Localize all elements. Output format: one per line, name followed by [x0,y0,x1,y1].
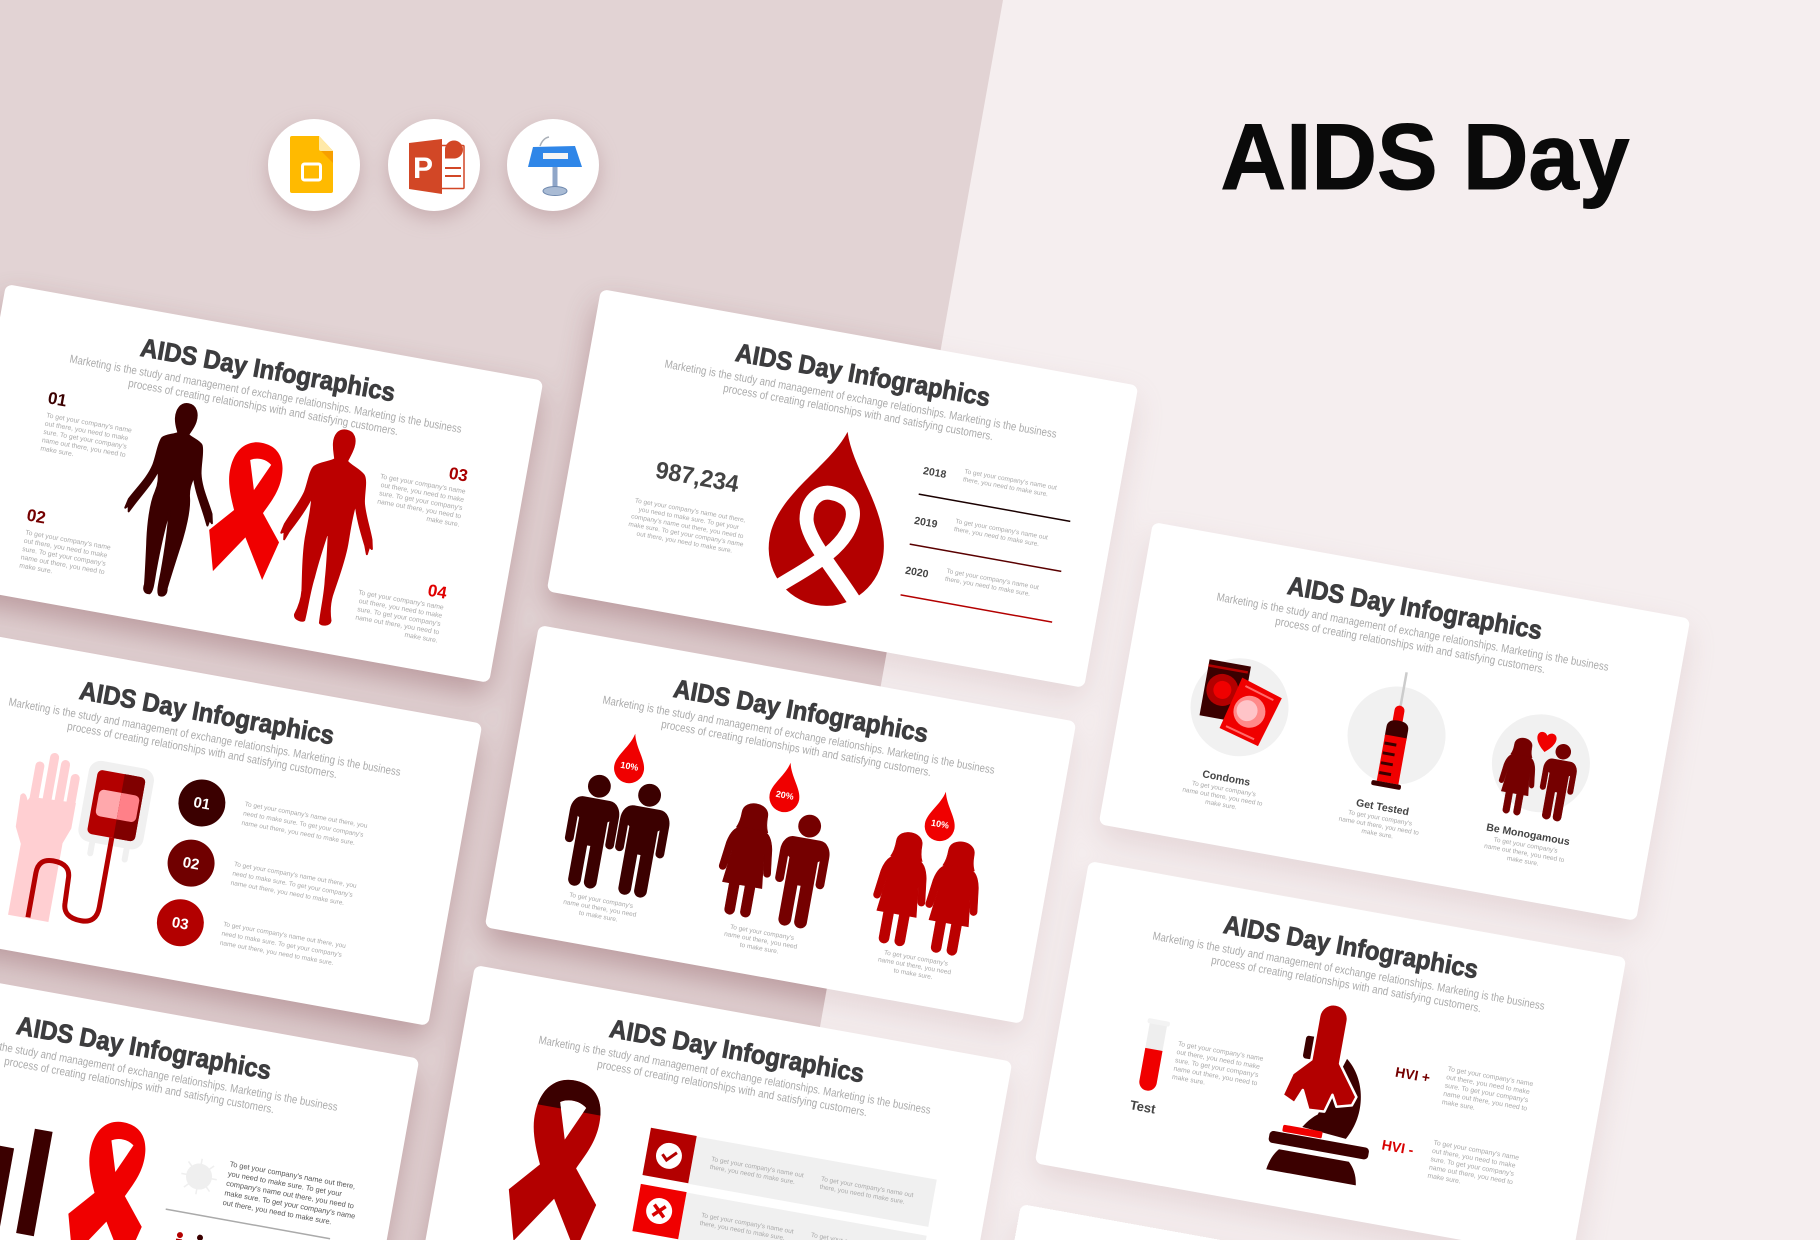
paragraph: you need to make sure. To get your [638,506,740,531]
year 2020: 2020 [904,565,929,581]
label get tested: Get Tested [1355,797,1410,818]
circle 02 [164,836,218,890]
slide card 8: ribbon with checklist [421,965,1012,1240]
text block 04: name out there, you need to [355,614,440,636]
text hvi plus [1441,1066,1534,1121]
group 2: woman and man: to make sure. [739,942,779,956]
text test: make sure. [1171,1074,1206,1087]
icon: microscope [1263,997,1394,1187]
text 01: need to make sure. To get your company's [243,810,365,839]
slide card 9: cropped bottom right [967,1204,1558,1240]
text condoms: name out there, you need to [1182,786,1263,808]
text block 03: name out there, you need to [377,498,462,520]
heading: AIDS Day Infographics [1221,909,1481,984]
text block 01 [40,412,132,468]
icon: keynote [507,119,599,211]
subtitle: Marketing is the study and management of exchange relationships. Marketing is the business [8,697,402,779]
paragraph [626,497,749,557]
subtitle: Marketing is the study and management of exchange relationships. Marketing is the business [664,359,1058,441]
divider [166,1209,330,1239]
text test: out there, you need to make [1176,1049,1261,1071]
small people icons [174,1231,203,1240]
text condoms: make sure. [1205,799,1238,811]
slide card 4: couples and drops [485,625,1076,1024]
red ribbon [61,1116,159,1240]
text test: sure. To get your company's [1174,1057,1260,1079]
text be monogamous: name out there, you need to [1484,843,1565,864]
group 1: two men: name out there, you need [563,899,637,919]
paragraph: you need to make sure. To get your [227,1169,343,1198]
text test: name out there, you need to [1173,1066,1258,1087]
text block 04: out there, you need to make [358,598,443,620]
paragraph: company's name out there, you need to [631,513,744,540]
main title: AIDS Day [1220,104,1630,209]
circle 02: 02 [181,854,201,874]
year 2018: there, you need to make sure. [962,476,1049,498]
subtitle: process of creating relationships with and satisfying customers. [1210,955,1482,1015]
text hvi minus: out there, you need to make [1431,1148,1516,1170]
icon: test tube [1135,1018,1170,1093]
group 1: two men: To get your company's [569,892,634,910]
text block 02: sure. To get your company's [22,546,107,568]
group 1: two men: 10% [620,760,639,773]
text condoms: To get your company's [1191,780,1257,799]
circle 03 [153,895,208,950]
text block 03: sure. To get your company's [378,490,464,512]
big number: 987,234 [653,457,741,498]
subtitle: Marketing is the study and management of exchange relationships. Marketing is the business [538,1035,932,1117]
group 2: woman and man [705,754,844,961]
text block 03: make sure. [426,516,460,529]
paragraph: make sure. To get your company's name [628,521,744,549]
row 1: check: To get your company's name out [820,1176,914,1199]
circle 01: 01 [192,794,211,814]
female silhouette [111,396,232,602]
row 2: cross [632,1184,927,1240]
group 3: two women: To get your company's [883,949,949,968]
male silhouette [267,422,392,631]
text hvi minus: To get your company's name [1433,1140,1520,1162]
text block 01: make sure. [40,445,74,458]
group 1: two men: to make sure. [578,910,618,924]
text be monogamous: To get your company's [1493,836,1559,855]
text block 01: out there, you need to make [44,421,129,442]
text be monogamous [1482,835,1567,872]
label test: Test [1129,1097,1157,1117]
text block 04 [352,589,445,645]
year 2019: there, you need to make sure. [953,526,1040,548]
blood bag [74,759,156,865]
text be monogamous: make sure. [1506,855,1539,868]
subtitle: Marketing is the study and management of exchange relationships. Marketing is the business [69,354,463,436]
text 01: name out there, you need to make sure. [241,820,356,847]
group 1: two men [552,725,684,930]
number 01: 01 [46,388,68,410]
group 3: two women [860,782,997,987]
slide card 2: blood drop [547,289,1138,688]
label be monogamous: Be Monogamous [1485,821,1571,848]
text get tested: name out there, you need to [1338,816,1420,837]
text hvi minus: sure. To get your company's [1430,1156,1515,1178]
text hvi plus: out there, you need to make [1446,1074,1530,1096]
icon: google slides [268,119,360,211]
red ribbon [202,436,296,582]
background diagonal darker panel [0,0,1003,1240]
subtitle: process of creating relationships with and satisfying customers. [127,378,399,438]
text block 02: name out there, you need to [20,554,105,576]
text get tested: make sure. [1361,828,1394,840]
subtitle: process of creating relationships with and satisfying customers. [3,1056,275,1116]
icon: couple and heart [1483,706,1598,826]
group 3: two women: 10% [930,818,950,831]
year 2018: To get your company's name out [964,468,1057,492]
year 2019 [910,511,1067,571]
number 02: 02 [25,506,47,528]
icon: virus [178,1156,220,1197]
text block 01: name out there, you need to [41,437,126,459]
row 1: check: there, you need to make sure. [819,1184,905,1206]
blood drop with white ribbon [759,422,904,615]
icon: powerpoint [388,119,480,211]
text hvi plus: To get your company's name [1447,1066,1534,1088]
text 02: To get your company's name out there, you [233,861,358,890]
slide card 6: microscope test [1035,861,1626,1240]
year 2020: To get your company's name out [946,568,1040,591]
text block 04: sure. To get your company's [357,606,442,628]
subtitle: process of creating relationships with and satisfying customers. [66,721,338,781]
paragraph: company's name out there, you need to [225,1179,355,1210]
text 03: need to make sure. To get your company's [221,930,343,959]
text 02 [230,861,358,909]
text block 01: To get your company's name [46,412,132,435]
text 01 [241,801,368,849]
group 2: woman and man: 20% [775,789,794,802]
text 03: To get your company's name out there, you [223,921,347,950]
text block 01: sure. To get your company's [43,429,128,451]
year 2018 [919,461,1076,521]
text hvi minus: make sure. [1427,1173,1461,1185]
heading: AIDS Day Infographics [138,332,398,407]
slide card 7: bars and ribbon [0,962,419,1240]
text hvi plus: name out there, you need to [1443,1091,1528,1113]
slide card 1: body silhouettes [0,284,543,683]
slide card 5: prevention [1099,522,1690,921]
text block 02: make sure. [19,562,53,575]
tube [28,826,112,929]
subtitle: process of creating relationships with and satisfying customers. [596,1059,868,1119]
number 04: 04 [426,581,449,603]
paragraph [222,1159,361,1230]
group 2: woman and man: name out there, you need [724,931,798,951]
year 2019: 2019 [913,515,938,531]
text block 03 [374,473,467,529]
text block 03: out there, you need to make [380,482,465,504]
group 2: woman and man: To get your company's [729,924,795,942]
text 01: To get your company's name out there, you [244,801,368,830]
app icons row [268,119,599,218]
icon: powerpoint: P [413,152,433,185]
subtitle: process of creating relationships with and satisfying customers. [660,719,932,779]
group 3: two women: name out there, you need [877,956,952,976]
text 03 [219,921,347,969]
text block 02 [19,529,111,585]
paragraph: out there, you need to make sure. [636,531,733,555]
label hvi plus: HVI + [1394,1064,1431,1086]
heading: AIDS Day Infographics [77,675,337,750]
text 02: name out there, you need to make sure. [230,880,345,907]
text block 04: To get your company's name [358,589,444,612]
row 1: check: there, you need to make sure. [709,1164,796,1186]
year 2019: To get your company's name out [955,518,1048,542]
subtitle: process of creating relationships with and satisfying customers. [722,383,994,443]
label hvi minus: HVI - [1381,1136,1415,1158]
paragraph: make sure. To get your company's name [224,1188,356,1221]
year 2018: 2018 [922,465,947,481]
group 3: two women: to make sure. [893,967,933,981]
text hvi minus: name out there, you need to [1428,1164,1514,1186]
icon: condoms [1183,650,1296,764]
paragraph: out there, you need to make sure. [222,1198,332,1226]
text block 03: To get your company's name [379,473,466,496]
text 02: need to make sure. To get your company's [232,870,354,899]
heading: AIDS Day Infographics [1285,570,1545,645]
subtitle: Marketing is the study and management of exchange relationships. Marketing is the business [1216,592,1610,674]
circle 03: 03 [170,914,190,934]
text hvi plus: sure. To get your company's [1444,1082,1529,1104]
text condoms [1180,779,1265,816]
heading: AIDS Day Infographics [733,337,993,412]
text get tested [1337,808,1421,845]
subtitle: process of creating relationships with and satisfying customers. [1274,616,1546,676]
text block 04: make sure. [404,632,438,645]
dark red ribbon [508,1080,600,1240]
bar chart [0,1123,53,1236]
text hvi plus: make sure. [1441,1099,1476,1112]
label condoms: Condoms [1201,768,1251,789]
circle 01 [175,776,229,830]
year 2020 [901,561,1058,622]
text hvi minus [1427,1140,1520,1195]
text 03: name out there, you need to make sure. [219,940,334,967]
text test: To get your company's name [1177,1041,1264,1063]
row 1: check [642,1128,937,1227]
subtitle: Marketing is the study and management of exchange relationships. Marketing is the business [602,695,996,777]
slide card 3: blood bag [0,627,482,1026]
text get tested: To get your company's [1348,809,1413,828]
text test [1171,1041,1264,1096]
heading: AIDS Day Infographics [607,1013,867,1088]
year 2020: there, you need to make sure. [944,576,1031,598]
icon: syringe [1339,664,1456,796]
heading: AIDS Day Infographics [671,673,931,748]
hand [0,753,83,923]
paragraph: To get your company's name out there, [634,497,746,524]
row 1: check: To get your company's name out [711,1156,804,1179]
subtitle: Marketing is the study and management of exchange relationships. Marketing is the business [1152,931,1546,1013]
text block 02: out there, you need to make [23,538,108,560]
heading: AIDS Day Infographics [14,1010,274,1085]
row 2: cross: To get your company's name out [701,1212,794,1236]
paragraph: To get your company's name out there, [229,1159,356,1191]
text block 02: To get your company's name [25,529,111,552]
number 03: 03 [447,464,469,486]
